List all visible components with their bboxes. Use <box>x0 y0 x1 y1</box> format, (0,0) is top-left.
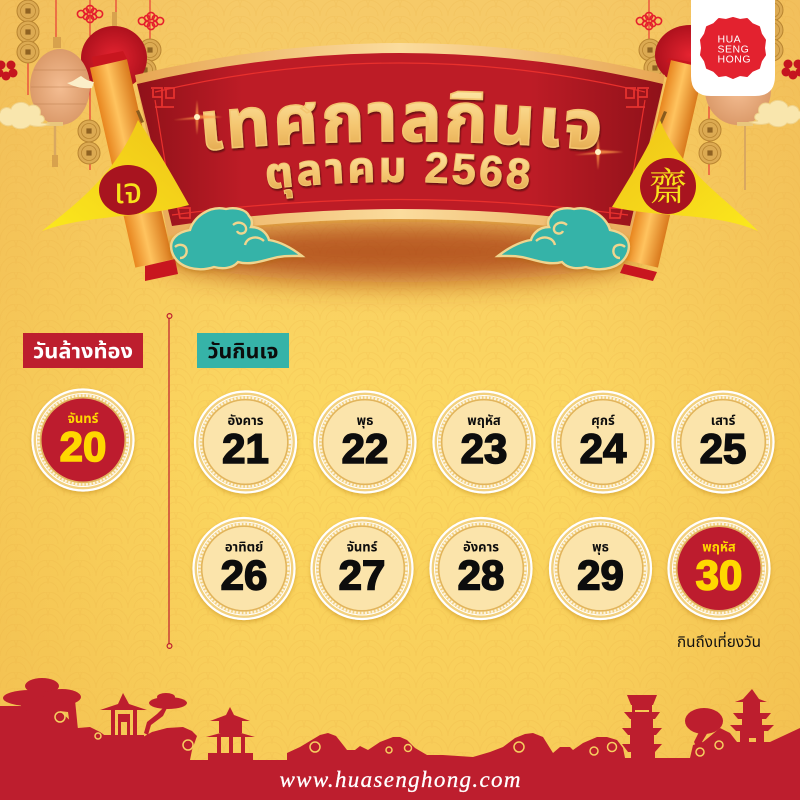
divider <box>167 314 172 648</box>
date badge 28: อังคาร <box>463 540 499 554</box>
date badge 26: อาทิตย์ <box>225 540 263 554</box>
date badge 25: 25 <box>700 425 746 472</box>
title <box>202 90 602 202</box>
left pennant flag <box>42 110 189 231</box>
date badge 23: 23 <box>461 425 507 472</box>
right pennant flag <box>612 111 758 231</box>
logo badge: SENG <box>718 44 749 56</box>
date badge 26: 26 <box>221 552 267 598</box>
date badge 29: พุธ <box>592 540 609 554</box>
pine tree left <box>3 678 81 730</box>
sparkles <box>174 100 624 170</box>
date badge 23 <box>434 392 534 492</box>
heading: vegetarian days: วันกินเจ <box>208 341 278 363</box>
banner red panel <box>137 53 663 226</box>
right hanging decorations <box>636 0 800 190</box>
date badge 29: 29 <box>577 552 624 598</box>
date badge 20: 20 <box>60 423 106 470</box>
teal cloud right <box>498 208 629 269</box>
banner frame <box>135 43 665 236</box>
date badge 24: 24 <box>580 425 627 472</box>
tall pagoda <box>622 695 662 760</box>
left scroll roller <box>67 51 178 281</box>
pine tree middle <box>144 693 187 735</box>
footer silhouette <box>0 678 800 800</box>
date badge 22 <box>314 392 416 492</box>
heading: cleansing day <box>23 333 143 368</box>
note: until noon: กินถึงเที่ยงวัน <box>677 631 761 651</box>
tree right <box>685 708 723 754</box>
logo badge: HUA <box>718 34 741 46</box>
date badge 27 <box>312 518 412 619</box>
teal cloud left <box>171 208 302 269</box>
date badge 21: 21 <box>222 425 269 472</box>
logo badge: HONG <box>718 54 751 66</box>
date badge 30: พฤหัส <box>702 540 736 554</box>
left hanging decorations <box>0 0 164 170</box>
flag emblem: 齋 <box>649 156 687 211</box>
date badge 23: พฤหัส <box>467 413 501 428</box>
icon: plum flower left <box>0 60 18 80</box>
heading: cleansing day: วันล้างท้อง <box>33 341 133 363</box>
subtitle: ตุลาคม 2568 <box>266 152 532 202</box>
date badge 29 <box>550 518 651 619</box>
date badge 21 <box>195 392 296 492</box>
date badge 22: 22 <box>342 425 388 472</box>
heading: vegetarian days <box>197 333 289 368</box>
icon: knots left <box>77 5 164 30</box>
icon: red lantern left <box>81 12 147 90</box>
date badge 26 <box>194 518 294 619</box>
icon: coins left <box>17 0 161 164</box>
ground <box>0 706 800 800</box>
logo badge <box>701 18 765 78</box>
date badge 30: 30 <box>696 552 742 598</box>
flag emblem: เจ <box>114 170 142 211</box>
date badge 21: อังคาร <box>228 413 264 428</box>
icon: cream cloud left <box>0 102 49 129</box>
date badge 25 <box>672 392 774 492</box>
corner ornaments <box>151 88 649 218</box>
pavilion left <box>100 693 147 740</box>
flag emblem <box>99 165 157 215</box>
date badge 24: ศุกร์ <box>591 413 615 428</box>
date badge 20 <box>32 390 134 490</box>
flag emblem <box>640 156 696 214</box>
title: เทศกาลกินเจ <box>202 90 602 154</box>
footer swirls <box>55 712 723 756</box>
date badge 24 <box>552 392 654 492</box>
right scroll roller <box>620 58 704 281</box>
banner shadow <box>160 222 640 282</box>
date badge 20: จันทร์ <box>68 411 99 426</box>
date badge 28 <box>430 518 532 619</box>
pagoda right <box>730 689 774 747</box>
date badge 27: จันทร์ <box>347 540 378 554</box>
date badge 25: เสาร์ <box>711 413 736 428</box>
pagoda small <box>206 707 255 761</box>
scroll banner <box>135 43 665 236</box>
date badge 27: 27 <box>339 552 385 598</box>
icon: pale lantern left <box>30 37 90 167</box>
website url: www.huasenghong.com <box>280 767 520 792</box>
date badge 28: 28 <box>458 552 504 598</box>
logo tab <box>691 0 775 96</box>
date badge 30 <box>668 518 770 619</box>
date badge 22: พุธ <box>357 413 373 428</box>
